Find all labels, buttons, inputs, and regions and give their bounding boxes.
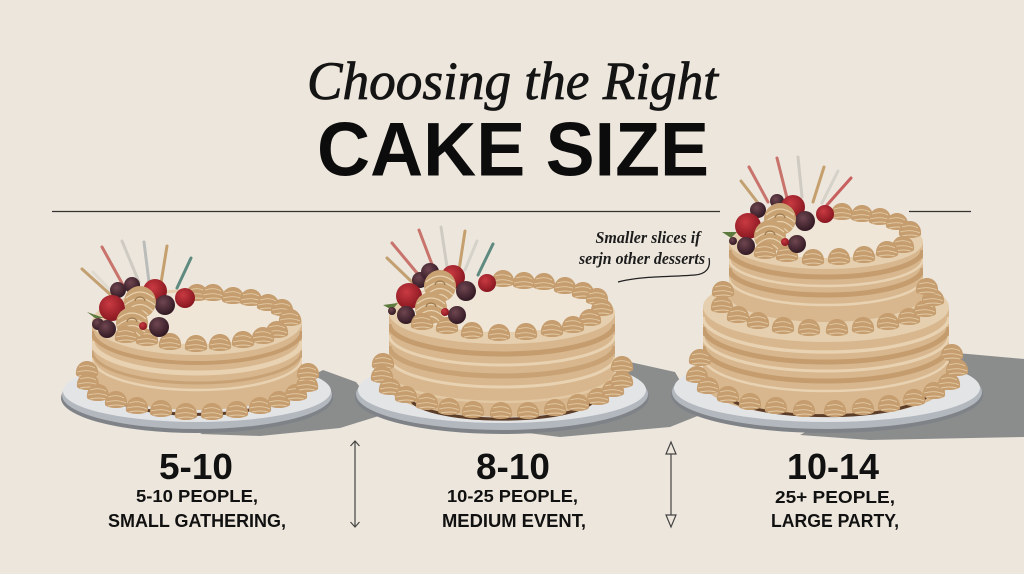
title: Choosing the Right (307, 51, 720, 111)
label: small cake: SMALL GATHERING, (108, 511, 286, 531)
berries: small cake (87, 277, 195, 343)
large two-tier cake (671, 157, 983, 433)
candles: medium cake (387, 227, 493, 282)
callout: smaller slices note: serjn other desserts (578, 249, 705, 268)
title (307, 51, 720, 192)
plate: medium cake (355, 357, 649, 434)
label: medium cake: 8-10 (476, 446, 550, 487)
piping: medium cake (371, 270, 633, 419)
callout: smaller slices note (578, 228, 709, 282)
candles: small cake (82, 241, 191, 296)
label: small cake: 5-10 PEOPLE, (136, 486, 258, 506)
berries: large cake (722, 194, 834, 259)
label: small cake: 5-10 (159, 446, 233, 487)
berries: medium cake (383, 263, 496, 330)
label: large cake: LARGE PARTY, (771, 511, 899, 531)
cake body: small cake (92, 289, 302, 410)
candles: large cake (741, 157, 851, 205)
label: medium cake: MEDIUM EVENT, (442, 511, 586, 531)
callout: smaller slices note: Smaller slices if (596, 228, 703, 247)
lower tier (703, 294, 949, 417)
cake body: medium cake (389, 282, 615, 417)
table shadows (200, 353, 1024, 440)
label: medium cake: 10-25 PEOPLE, (447, 486, 578, 506)
label: small cake (108, 446, 286, 531)
small cake (61, 241, 333, 433)
title: CAKE SIZE (317, 108, 709, 192)
plate: large cake (671, 354, 983, 433)
medium cake (355, 227, 649, 434)
label: medium cake (442, 446, 586, 531)
piping: large cake (686, 203, 968, 417)
upper tier (729, 232, 923, 322)
piping: small cake (76, 284, 319, 420)
plate: small cake (61, 360, 333, 433)
arrow: small to medium (350, 441, 360, 527)
label: large cake (771, 446, 899, 531)
label: large cake: 10-14 (787, 446, 879, 487)
arrow: medium to large (666, 442, 676, 527)
label: large cake: 25+ PEOPLE, (775, 487, 895, 507)
